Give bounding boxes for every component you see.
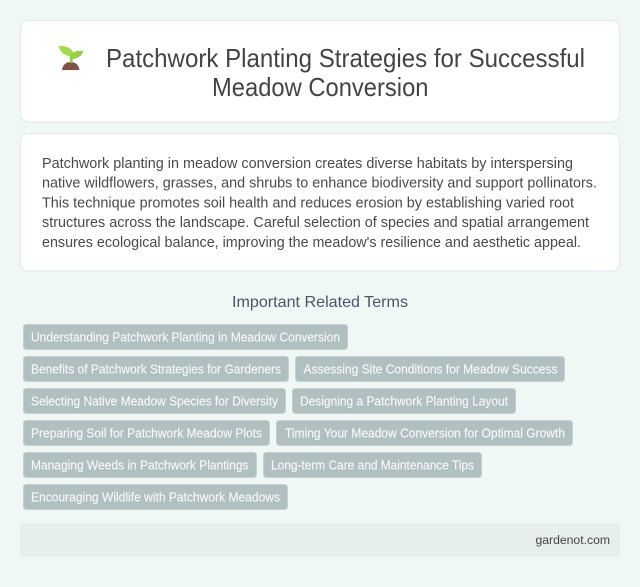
description text: structures across the landscape. Careful selection of species and spatial arrangement	[42, 215, 589, 231]
tag: understanding: Understanding Patchwork Planting in Meadow Conversion	[31, 330, 340, 344]
tag: timing	[276, 420, 572, 446]
description text: Patchwork planting in meadow conversion creates diverse habitats by interspersing	[42, 156, 573, 172]
tag: selecting	[24, 388, 286, 414]
panel: header card	[20, 20, 620, 122]
tag: selecting: Selecting Native Meadow Species for Diversity	[31, 394, 279, 408]
heading: important related terms: Important Related Terms	[232, 294, 408, 311]
tag: assessing: Assessing Site Conditions for Meadow Success	[304, 362, 558, 376]
description text	[42, 156, 597, 251]
tag: designing: Designing a Patchwork Planting Layout	[300, 394, 508, 408]
tag: managing	[24, 452, 256, 478]
tag: encouraging	[24, 484, 288, 510]
title	[106, 45, 585, 102]
tag: long-term: Long-term Care and Maintenance Tips	[271, 458, 474, 472]
description text: ensures ecological balance, improving the meadow's resilience and aesthetic appeal.	[42, 235, 581, 251]
title: Patchwork Planting Strategies for Successful	[106, 45, 585, 73]
footer source text: gardenot.com	[536, 533, 610, 547]
tag: assessing	[296, 356, 564, 382]
tag: understanding	[24, 324, 348, 350]
tag: long-term	[264, 452, 482, 478]
tag: preparing	[24, 420, 270, 446]
footer	[20, 523, 620, 557]
tag: timing: Timing Your Meadow Conversion for Optimal Growth	[285, 426, 565, 440]
description text: This technique promotes soil health and reduces erosion by establishing varied root	[42, 196, 574, 212]
icon: seedling	[58, 46, 84, 70]
tag: encouraging: Encouraging Wildlife with Patchwork Meadows	[31, 490, 280, 504]
panel: description card	[20, 134, 620, 271]
tag: benefits: Benefits of Patchwork Strategies for Gardeners	[31, 362, 281, 376]
tag list	[24, 324, 572, 510]
tag: benefits	[24, 356, 288, 382]
description text: native wildflowers, grasses, and shrubs to enhance biodiversity and support pollinators.	[42, 176, 597, 192]
tag: designing	[292, 388, 516, 414]
tag: preparing: Preparing Soil for Patchwork Meadow Plots	[31, 426, 262, 440]
title: Meadow Conversion	[212, 74, 428, 102]
tag: managing: Managing Weeds in Patchwork Plantings	[31, 458, 248, 472]
